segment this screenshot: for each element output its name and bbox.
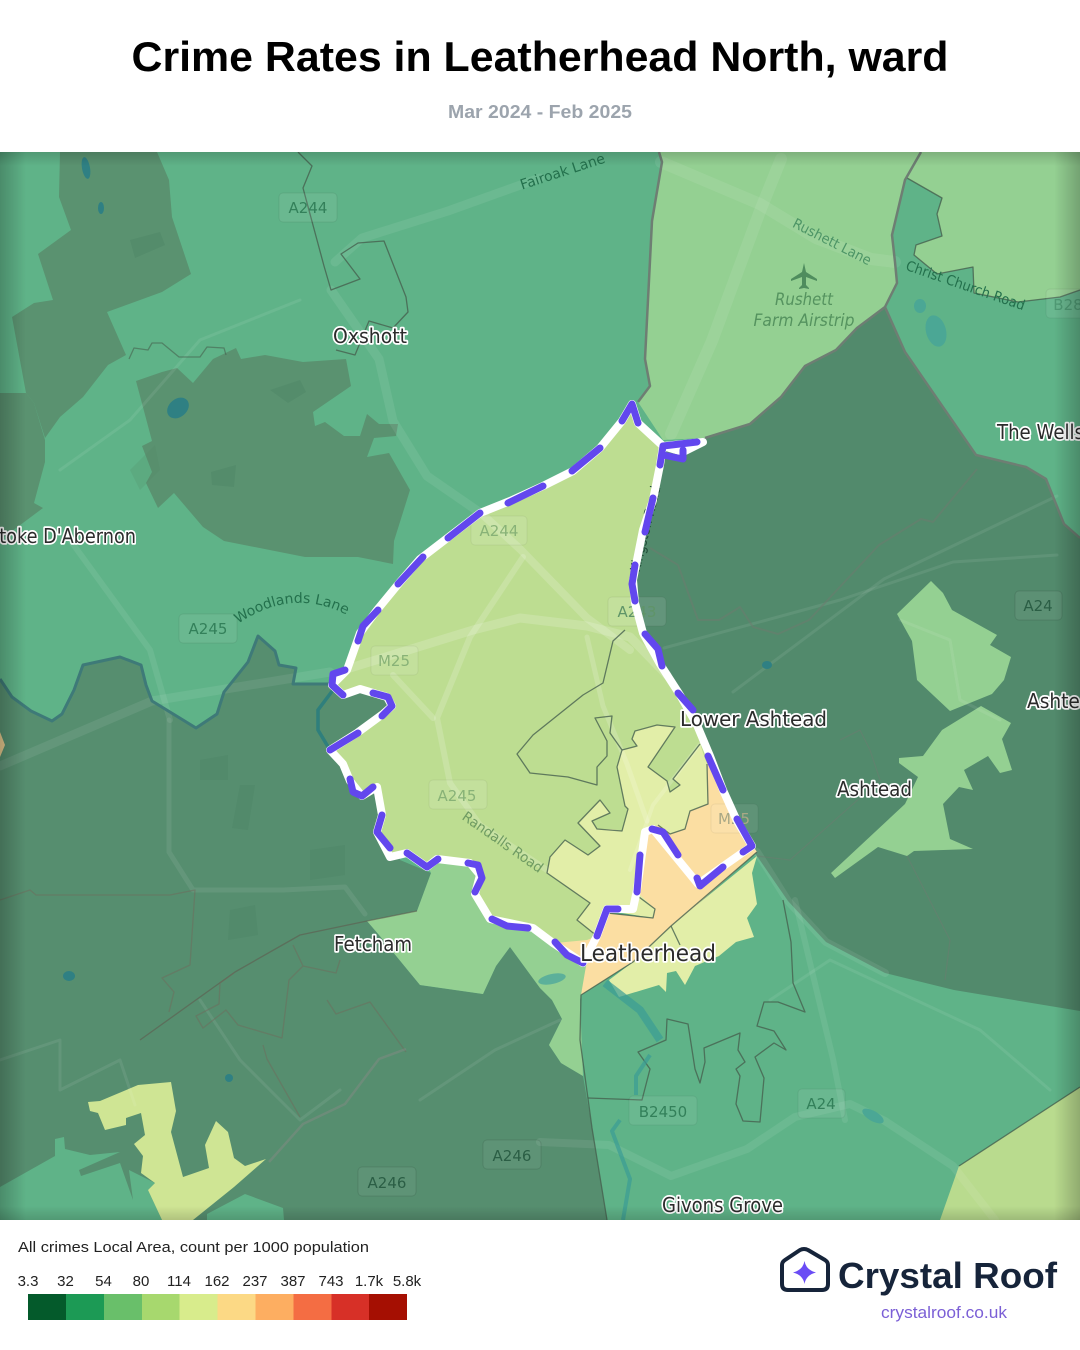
region: pale green south-east corner xyxy=(940,1087,1080,1220)
shield A243: A243 xyxy=(618,603,656,621)
shield B2450 xyxy=(629,1096,697,1125)
icon: house with star xyxy=(782,1249,828,1290)
shield A245 ward xyxy=(429,780,487,809)
field patches xyxy=(130,455,152,490)
shield M25 east xyxy=(711,804,758,833)
choropleth map xyxy=(0,152,1080,1220)
label Lower Ashtead: Lower Ashtead xyxy=(680,707,827,731)
label Oxshott: Oxshott xyxy=(333,324,407,348)
legend scale values: 3.3 xyxy=(18,1273,38,1290)
region: south-west mid greens xyxy=(0,1137,284,1220)
small orange edge area xyxy=(0,732,5,757)
subtitle: date range: Mar 2024 - Feb 2025 xyxy=(448,101,632,122)
road label Randalls Road: Randalls Road xyxy=(459,809,546,877)
region: light green north-east corner xyxy=(907,152,1080,302)
legend scale values: 237 xyxy=(242,1273,268,1290)
shield B2450: B2450 xyxy=(639,1103,687,1121)
region: yellow area south-east of Leatherhead xyxy=(609,856,757,997)
road label Fairoak Lane: Fairoak Lane xyxy=(518,151,607,193)
road label Christ Church Road: Christ Church Road xyxy=(904,258,1027,314)
road shields xyxy=(179,193,1080,1196)
region: pale green pocket inside ward xyxy=(648,727,700,792)
region: light green Ashtead area xyxy=(831,581,1012,878)
shield A24 north xyxy=(1015,591,1062,620)
logo: Crystal Roof xyxy=(782,1249,1058,1322)
shield A245 ward: A245 xyxy=(438,787,476,805)
ward boundary: white line xyxy=(330,404,752,963)
legend scale values: 54 xyxy=(95,1273,112,1290)
legend scale values: 1.7k xyxy=(355,1273,384,1290)
legend scale values: 387 xyxy=(280,1273,306,1290)
legend title: All crimes Local Area, count per 1000 population xyxy=(18,1239,369,1256)
region: light green Fetcham area xyxy=(367,859,587,1076)
shield A244 north: A244 xyxy=(289,199,327,217)
shield A24 south xyxy=(798,1089,845,1118)
river branch near ward xyxy=(318,690,333,750)
legend colour bar xyxy=(28,1294,407,1320)
legend xyxy=(18,1239,422,1320)
label Rushett Farm Airstrip: Farm Airstrip xyxy=(754,311,855,331)
shield M25 west xyxy=(371,646,418,675)
wordmark: Crystal Roof xyxy=(838,1255,1058,1296)
label Leatherhead: Leatherhead xyxy=(580,941,716,967)
region: dark low-crime areas, north-west xyxy=(0,152,410,564)
region: orange high-crime area xyxy=(581,756,757,995)
legend scale values: 80 xyxy=(133,1273,149,1290)
road label Woodlands Lane: Woodlands Lane xyxy=(233,592,348,622)
label Rushett Farm Airstrip: Rushett xyxy=(775,290,834,310)
legend scale values: 743 xyxy=(318,1273,344,1290)
label Fetcham: Fetcham xyxy=(334,932,412,956)
road names xyxy=(233,156,1026,914)
region: yellow sliver beside ward boundary xyxy=(622,895,655,918)
grey borders between light and mid areas xyxy=(638,152,1080,538)
legend scale values: 32 xyxy=(57,1273,74,1290)
lakes xyxy=(63,156,950,1126)
title: Crime Rates in Leatherhead North, ward xyxy=(132,33,948,80)
shield A244 ward: A244 xyxy=(480,522,518,540)
shield A246 east xyxy=(483,1140,541,1169)
place labels xyxy=(0,324,1080,1217)
shield A245 west xyxy=(179,614,237,643)
river south of Leatherhead xyxy=(605,983,660,1220)
thin boundary lines xyxy=(0,152,1080,1220)
shield A243 xyxy=(608,597,666,626)
shield M25 west: M25 xyxy=(378,652,410,670)
river Mole xyxy=(0,636,333,728)
shield A246 east: A246 xyxy=(493,1147,531,1165)
website: crystalroof.co.uk xyxy=(881,1303,1008,1322)
legend scale values xyxy=(18,1273,422,1290)
label Rushett Farm Airstrip xyxy=(754,290,855,331)
label Givons Grove: Givons Grove xyxy=(662,1193,783,1217)
icon: airstrip plane xyxy=(791,263,817,289)
shield M25 east: M25 xyxy=(718,810,750,828)
region: dark low-crime area, east xyxy=(620,307,1080,1011)
shield A24 north: A24 xyxy=(1023,597,1053,615)
shield B28 clipped xyxy=(1046,289,1080,318)
shield A244 ward xyxy=(471,516,527,545)
region: orange sliver west of Leatherhead xyxy=(560,938,592,956)
region: dark low-crime area, south-west xyxy=(0,636,607,1220)
shield A246 west: A246 xyxy=(368,1174,406,1192)
road label Rushett Lane: Rushett Lane xyxy=(790,216,874,269)
map edge shading xyxy=(0,152,1080,1220)
legend scale values: 5.8k xyxy=(393,1273,422,1290)
region: yellow area inside ward xyxy=(547,725,708,936)
shield A24 south: A24 xyxy=(806,1095,836,1113)
legend scale values: 162 xyxy=(204,1273,230,1290)
shield A246 west xyxy=(358,1167,416,1196)
shield A245 west: A245 xyxy=(189,620,227,638)
road label Kingston Road: Kingston Road xyxy=(628,484,665,574)
region: Leatherhead North ward fill xyxy=(336,414,708,942)
legend scale values: 114 xyxy=(167,1273,191,1290)
region: light green Rushett area xyxy=(638,152,921,440)
roads outside ward xyxy=(0,159,1057,1220)
label Ashtead: Ashtead xyxy=(837,777,912,801)
roads inside ward xyxy=(350,514,700,870)
region: yellow-green Bookham patch xyxy=(88,1082,266,1220)
ward boundary: purple dashes xyxy=(330,404,752,963)
shield A244 north xyxy=(279,193,337,222)
